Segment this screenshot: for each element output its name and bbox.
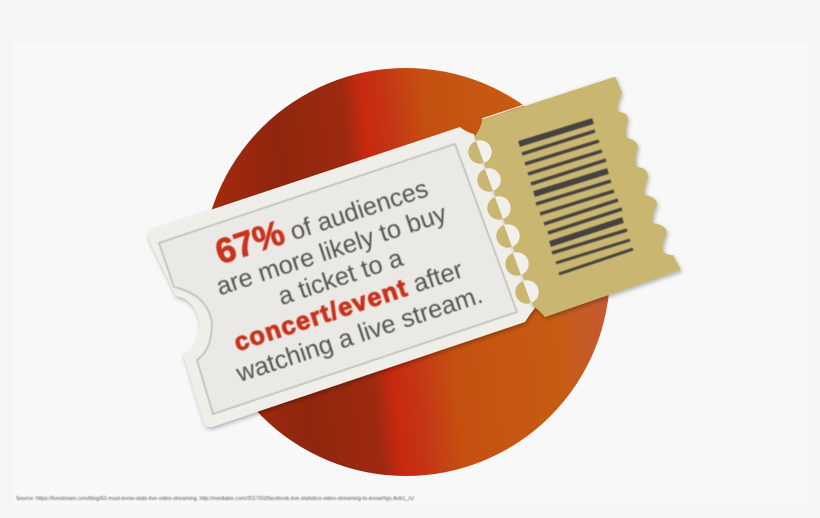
ticket main body (148, 127, 535, 427)
red-orange gradient disc (202, 68, 610, 476)
stub top highlight (482, 76, 612, 119)
ticket stub (468, 76, 681, 317)
line 4: concert/event after (231, 256, 466, 357)
barcode (519, 121, 633, 274)
perforation circles (468, 140, 539, 304)
source citation: Source: https://livestream.com/blog/62-must-know-stats-live-video-streaming, http://mediakix.com/2017/03/facebook-live-statistics-video-streaming-to-know/#gs.Anb1_rU (16, 496, 414, 502)
line 3: a ticket to a (275, 244, 407, 311)
line 5: watching a live stream. (232, 281, 486, 388)
line 2: are more likely to buy (213, 199, 450, 301)
line 1: 67% of audiences (211, 166, 432, 272)
ticket inner border (159, 144, 517, 414)
ticket message text (211, 166, 486, 388)
